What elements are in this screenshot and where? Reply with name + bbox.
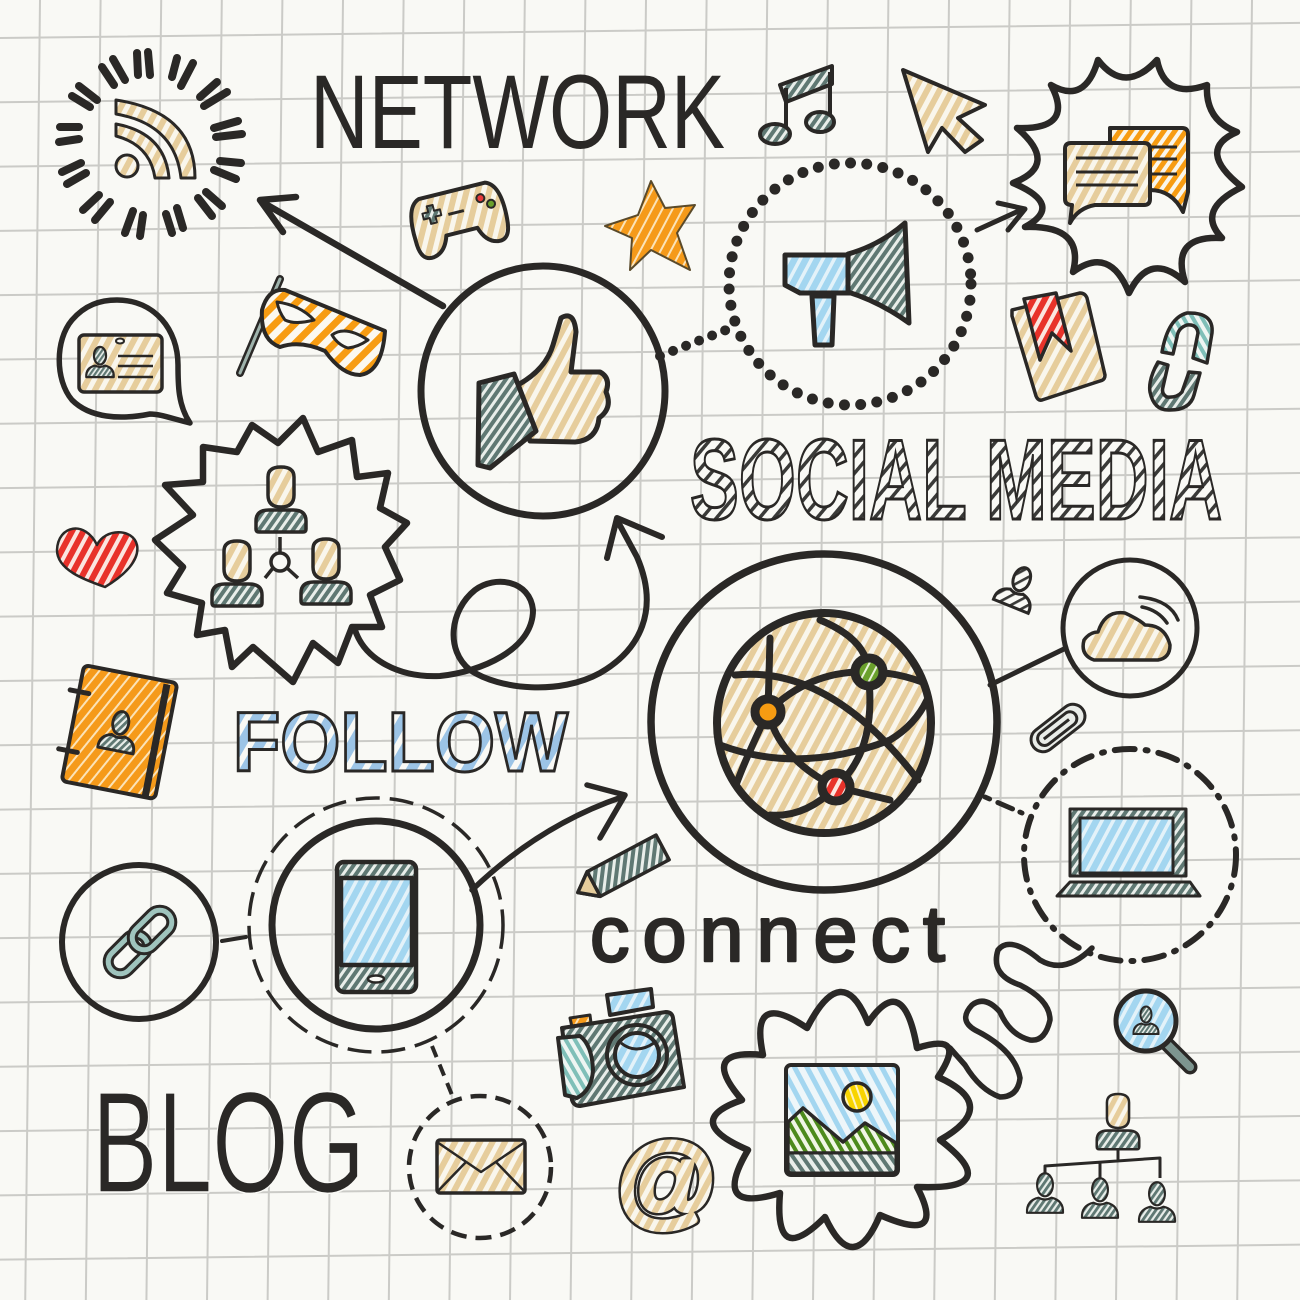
icon: cursor arrow bbox=[903, 70, 985, 152]
panel: picture gear with squiggle bbox=[713, 944, 1092, 1247]
arrow: megaphone to chat bbox=[977, 203, 1025, 230]
icon: megaphone bbox=[785, 223, 909, 345]
icon: cloud with signal bbox=[1083, 597, 1178, 660]
panel: envelope dashed circle bbox=[409, 1046, 551, 1238]
panel: people burst bbox=[155, 418, 407, 682]
icon: music note bbox=[760, 66, 834, 144]
icon: thumb up bbox=[478, 316, 608, 468]
icon: org chart bbox=[1027, 1094, 1175, 1222]
arrow: looping curve to thumb bbox=[355, 518, 662, 687]
icon: pencil bbox=[571, 835, 669, 905]
icon: small person bbox=[993, 561, 1044, 613]
icon: three people network bbox=[212, 467, 351, 606]
icon: globe network bbox=[717, 613, 931, 833]
panel: laptop dashed circle bbox=[985, 749, 1236, 961]
icon: ID card bubble bbox=[59, 300, 190, 423]
icon: chain links bbox=[103, 905, 177, 979]
icon: smartphone bbox=[337, 862, 416, 992]
icon: party mask bbox=[240, 279, 385, 375]
panel: smartphone circle bbox=[249, 798, 503, 1052]
icon: RSS feed with rays bbox=[59, 52, 242, 236]
icon: laptop bbox=[1057, 809, 1200, 896]
panel: link circle bbox=[62, 865, 246, 1019]
icon: envelope bbox=[437, 1140, 525, 1193]
icon: paperclip bbox=[1026, 699, 1090, 757]
icon: at sign: @ bbox=[616, 1125, 718, 1237]
panel: cloud circle bbox=[990, 560, 1197, 696]
heading: BLOG: BLOG bbox=[92, 1062, 365, 1223]
icon: camera bbox=[558, 989, 684, 1106]
icon: broken chain link bbox=[1150, 313, 1212, 410]
squiggle connector bbox=[950, 944, 1092, 1097]
icon: landscape picture bbox=[786, 1065, 898, 1175]
dotted connector: thumb to megaphone bbox=[660, 330, 726, 356]
icon: at sign: @ bbox=[616, 1125, 718, 1237]
icon: address book bbox=[53, 663, 177, 799]
panel: globe circle bbox=[651, 554, 997, 890]
arrow: phone to globe bbox=[472, 785, 625, 890]
heading: connect: connect bbox=[590, 889, 945, 978]
icon: game controller bbox=[406, 179, 512, 261]
heading: FOLLOW: FOLLOW bbox=[233, 695, 569, 789]
arrow: thumb to RSS bbox=[260, 197, 443, 306]
panel: megaphone dotted circle bbox=[729, 163, 971, 405]
heading: NETWORK: NETWORK bbox=[310, 54, 725, 171]
icon: bookmark book bbox=[1012, 293, 1105, 400]
icon: star bbox=[605, 181, 695, 270]
icon: heart bbox=[57, 529, 137, 587]
panel: thumbs up circle bbox=[421, 266, 665, 516]
icon: magnifier search bbox=[1116, 991, 1190, 1067]
icon: chat burst bbox=[1013, 60, 1242, 293]
